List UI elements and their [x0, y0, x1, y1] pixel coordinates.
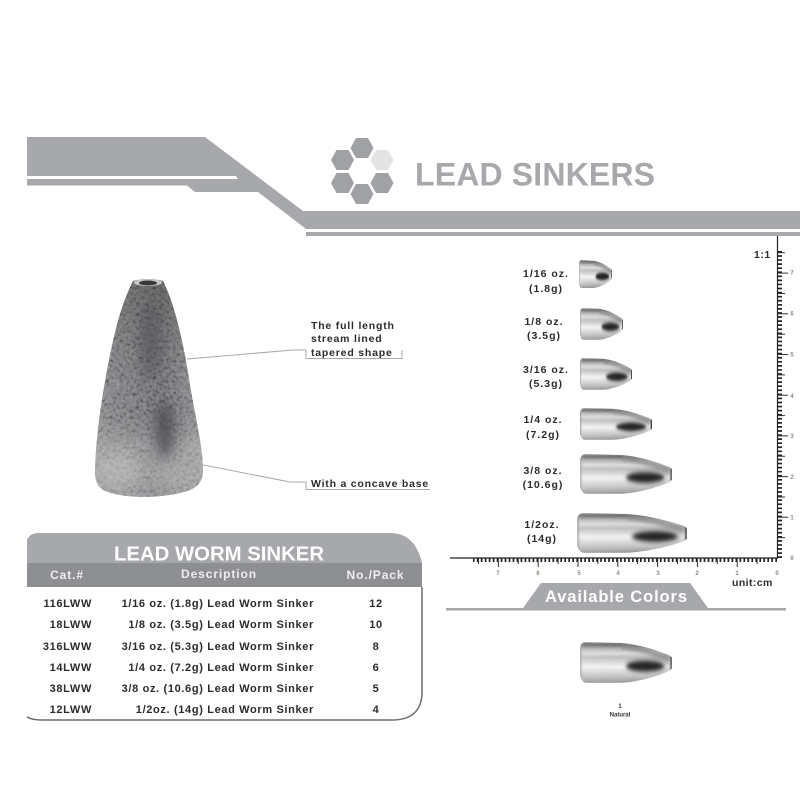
table rows: 38LWW [50, 683, 92, 695]
scale ruler: vertical: 3 [790, 434, 794, 440]
scale ruler: horizontal: 7 [496, 571, 500, 577]
table rows: 5 [373, 683, 379, 695]
callout: tapered shape: The full length [311, 320, 395, 332]
size chart: 1/8 oz [524, 308, 623, 342]
table rows: 12LWW [50, 704, 92, 716]
size chart: 1/16 oz: (1.8g) [529, 283, 563, 295]
size chart: 1/2 oz [524, 513, 687, 553]
color swatch: natural: Natural [610, 712, 631, 718]
size chart: 1/8 oz: (3.5g) [527, 330, 561, 342]
scale ruler: horizontal: 0 [775, 571, 779, 577]
size chart: 3/16 oz: (5.3g) [529, 378, 563, 390]
table rows: 3/8 oz. (10.6g) Lead Worm Sinker [122, 683, 314, 695]
table rows: 6 [373, 662, 379, 674]
table header band [27, 533, 422, 563]
size chart: 3/8 oz: (10.6g) [523, 479, 563, 491]
size chart: 3/16 oz: 3/16 oz. [523, 364, 569, 376]
size chart: 1/2 oz: (14g) [527, 533, 557, 545]
table rows: 3/16 oz. (5.3g) Lead Worm Sinker [122, 641, 314, 653]
scale ruler: vertical: 0 [790, 556, 794, 562]
table rows: 1/2oz. (14g) Lead Worm Sinker [136, 704, 314, 716]
scale ruler: horizontal: unit:cm [732, 577, 773, 589]
panel: product table [27, 533, 422, 720]
size chart: 3/16 oz [523, 358, 632, 390]
table rows: 116LWW [43, 598, 92, 610]
scale ruler: vertical: 4 [790, 394, 794, 400]
size chart: 1/16 oz [523, 260, 612, 295]
callout: tapered shape: tapered shape [311, 347, 393, 359]
size chart: 1/4 oz [523, 408, 652, 441]
column headers: No./Pack [347, 568, 404, 582]
table rows: 8 [373, 641, 379, 653]
table rows: 1/8 oz. (3.5g) Lead Worm Sinker [128, 619, 314, 631]
scale ruler: horizontal: 3 [656, 571, 660, 577]
size chart: 3/8 oz: 3/8 oz. [523, 465, 563, 477]
scale ruler: vertical: 7 [790, 270, 794, 276]
scale ruler: horizontal: 2 [695, 571, 699, 577]
color swatch: natural: 1 [618, 704, 622, 710]
callout: tapered shape [187, 320, 402, 359]
table column header band [27, 563, 422, 587]
scale ruler: vertical: 6 [790, 312, 794, 318]
table outline [27, 587, 422, 720]
table rows: 1/4 oz. (7.2g) Lead Worm Sinker [128, 662, 314, 674]
sinker photo [95, 279, 203, 497]
callout: tapered shape: stream lined [311, 333, 382, 345]
size chart: 3/8 oz [523, 454, 672, 494]
scale ruler: horizontal: 1 [735, 571, 739, 577]
table rows [43, 598, 383, 716]
table rows: 18LWW [50, 619, 92, 631]
section heading: available colors [446, 583, 786, 610]
scale ruler: horizontal [450, 558, 779, 589]
column headers: Cat.# [50, 568, 84, 582]
scale ruler: vertical [754, 236, 794, 562]
table rows: 10 [369, 619, 383, 631]
size chart: 1/8 oz: 1/8 oz. [524, 316, 564, 328]
column headers [50, 567, 404, 582]
table rows: 12 [369, 598, 383, 610]
table rows: 4 [373, 704, 380, 716]
scale ruler: horizontal: 4 [616, 571, 620, 577]
scale ruler: vertical: 5 [790, 352, 794, 358]
table rows: 14LWW [50, 662, 92, 674]
size chart: 1/4 oz: (7.2g) [526, 429, 560, 441]
table rows: 1/16 oz. (1.8g) Lead Worm Sinker [122, 598, 314, 610]
callout: concave base: With a concave base [311, 478, 429, 490]
icon: hexagon cluster logo [331, 138, 394, 204]
header banner [27, 137, 800, 236]
size chart: 1/16 oz: 1/16 oz. [523, 268, 569, 280]
scale ruler: horizontal: 6 [536, 571, 540, 577]
scale ruler: vertical: 1 [790, 516, 794, 522]
size chart: 1/2 oz: 1/2oz. [524, 519, 560, 531]
scale ruler: vertical: 1:1 [754, 249, 771, 261]
table rows: 316LWW [43, 641, 92, 653]
scale ruler: vertical: 2 [790, 475, 794, 481]
column headers: Description [181, 567, 257, 581]
size chart: 1/4 oz: 1/4 oz. [523, 414, 563, 426]
callout: concave base [183, 461, 430, 490]
table title: LEAD WORM SINKER [114, 542, 324, 566]
title: LEAD SINKERS [415, 156, 655, 192]
scale ruler: horizontal: 5 [577, 571, 581, 577]
section heading: available colors: Available Colors [545, 588, 687, 606]
color swatch: natural [580, 642, 672, 718]
